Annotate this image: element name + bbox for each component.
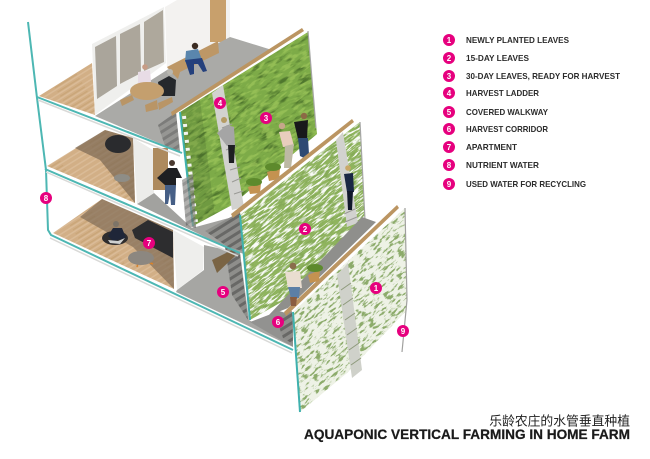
marker 9 bbox=[397, 325, 409, 337]
marker 2 bbox=[299, 223, 311, 235]
marker 1 bbox=[370, 282, 382, 294]
legend bbox=[443, 34, 621, 190]
bottom floor apartment bbox=[53, 199, 293, 347]
nutrient water pipes bbox=[28, 22, 293, 353]
middle floor furniture and resident bbox=[105, 135, 182, 205]
legend item 2 bbox=[443, 52, 529, 64]
top floor apartment bbox=[39, 0, 272, 152]
coffee table bbox=[128, 251, 154, 267]
title: 乐龄农庄的水管垂直种植 bbox=[489, 414, 630, 428]
legend item 5: 5 bbox=[447, 108, 452, 117]
legend item 3: 30-DAY LEAVES, READY FOR HARVEST bbox=[466, 71, 621, 81]
marker 6 bbox=[272, 316, 284, 328]
legend item 7: 7 bbox=[447, 143, 452, 152]
sofa bbox=[132, 220, 173, 258]
legend item 8: 8 bbox=[447, 161, 452, 170]
legend item 1 bbox=[443, 34, 569, 46]
legend item 1: NEWLY PLANTED LEAVES bbox=[466, 35, 569, 45]
panel 2: 15-day leaves bbox=[231, 119, 366, 320]
marker 3: 3 bbox=[264, 114, 269, 123]
marker 8 bbox=[40, 192, 52, 204]
people harvesting panel 3 bbox=[217, 113, 309, 168]
marker 2: 2 bbox=[303, 225, 308, 234]
legend item 7: APARTMENT bbox=[466, 142, 518, 152]
marker 4: 4 bbox=[218, 99, 223, 108]
legend item 8 bbox=[443, 159, 539, 171]
legend item 9 bbox=[443, 178, 586, 190]
legend item 5 bbox=[443, 106, 548, 118]
legend item 6: HARVEST CORRIDOR bbox=[466, 124, 548, 134]
legend item 2: 15-DAY LEAVES bbox=[466, 53, 529, 63]
marker 9: 9 bbox=[401, 327, 406, 336]
title: AQUAPONIC VERTICAL FARMING IN HOME FARM bbox=[304, 426, 630, 442]
harvest ladder in panel 3 bbox=[212, 85, 244, 210]
callout markers on the drawing bbox=[40, 97, 409, 337]
legend item 4: HARVEST LADDER bbox=[466, 88, 539, 98]
shelf above panel 2 bbox=[231, 119, 354, 218]
harvest ladder in panel 2 bbox=[336, 132, 358, 227]
legend item 6: 6 bbox=[447, 125, 452, 134]
legend item 6 bbox=[443, 123, 548, 135]
shelf above panel 3 bbox=[171, 28, 304, 116]
middle floor bbox=[47, 130, 250, 256]
harvest ladder in panel 1 bbox=[337, 263, 362, 378]
legend item 2: 2 bbox=[447, 54, 452, 63]
legend item 9: USED WATER FOR RECYCLING bbox=[466, 179, 586, 189]
legend item 4: 4 bbox=[447, 89, 452, 98]
planters bbox=[246, 163, 281, 194]
marker 1: 1 bbox=[374, 284, 379, 293]
used water pipe bbox=[402, 208, 407, 352]
marker 6: 6 bbox=[276, 318, 281, 327]
person on ladder 2 bbox=[344, 165, 354, 210]
legend item 4 bbox=[443, 87, 539, 99]
shelf above panel 1 bbox=[284, 205, 399, 316]
legend item 9: 9 bbox=[447, 180, 452, 189]
people at top floor bbox=[120, 43, 207, 112]
legend item 3: 3 bbox=[447, 72, 452, 81]
lower walkway to panel 1 bbox=[268, 217, 376, 316]
marker 7 bbox=[143, 237, 155, 249]
seated reader bbox=[102, 221, 128, 245]
legend item 5: COVERED WALKWAY bbox=[466, 107, 548, 117]
title bbox=[304, 414, 630, 442]
marker 7: 7 bbox=[147, 239, 152, 248]
marker 5: 5 bbox=[221, 288, 226, 297]
planter on walkway bbox=[307, 264, 323, 283]
legend item 8: NUTRIENT WATER bbox=[466, 160, 539, 170]
legend item 1: 1 bbox=[447, 36, 452, 45]
panel 1: newly planted leaves bbox=[284, 205, 408, 412]
marker 5 bbox=[217, 286, 229, 298]
marker 3 bbox=[260, 112, 272, 124]
panel 3: ready-for-harvest leaves bbox=[171, 28, 317, 226]
person in harvest corridor bbox=[285, 263, 302, 306]
marker 8: 8 bbox=[44, 194, 49, 203]
legend item 7 bbox=[443, 141, 518, 153]
marker 4 bbox=[214, 97, 226, 109]
